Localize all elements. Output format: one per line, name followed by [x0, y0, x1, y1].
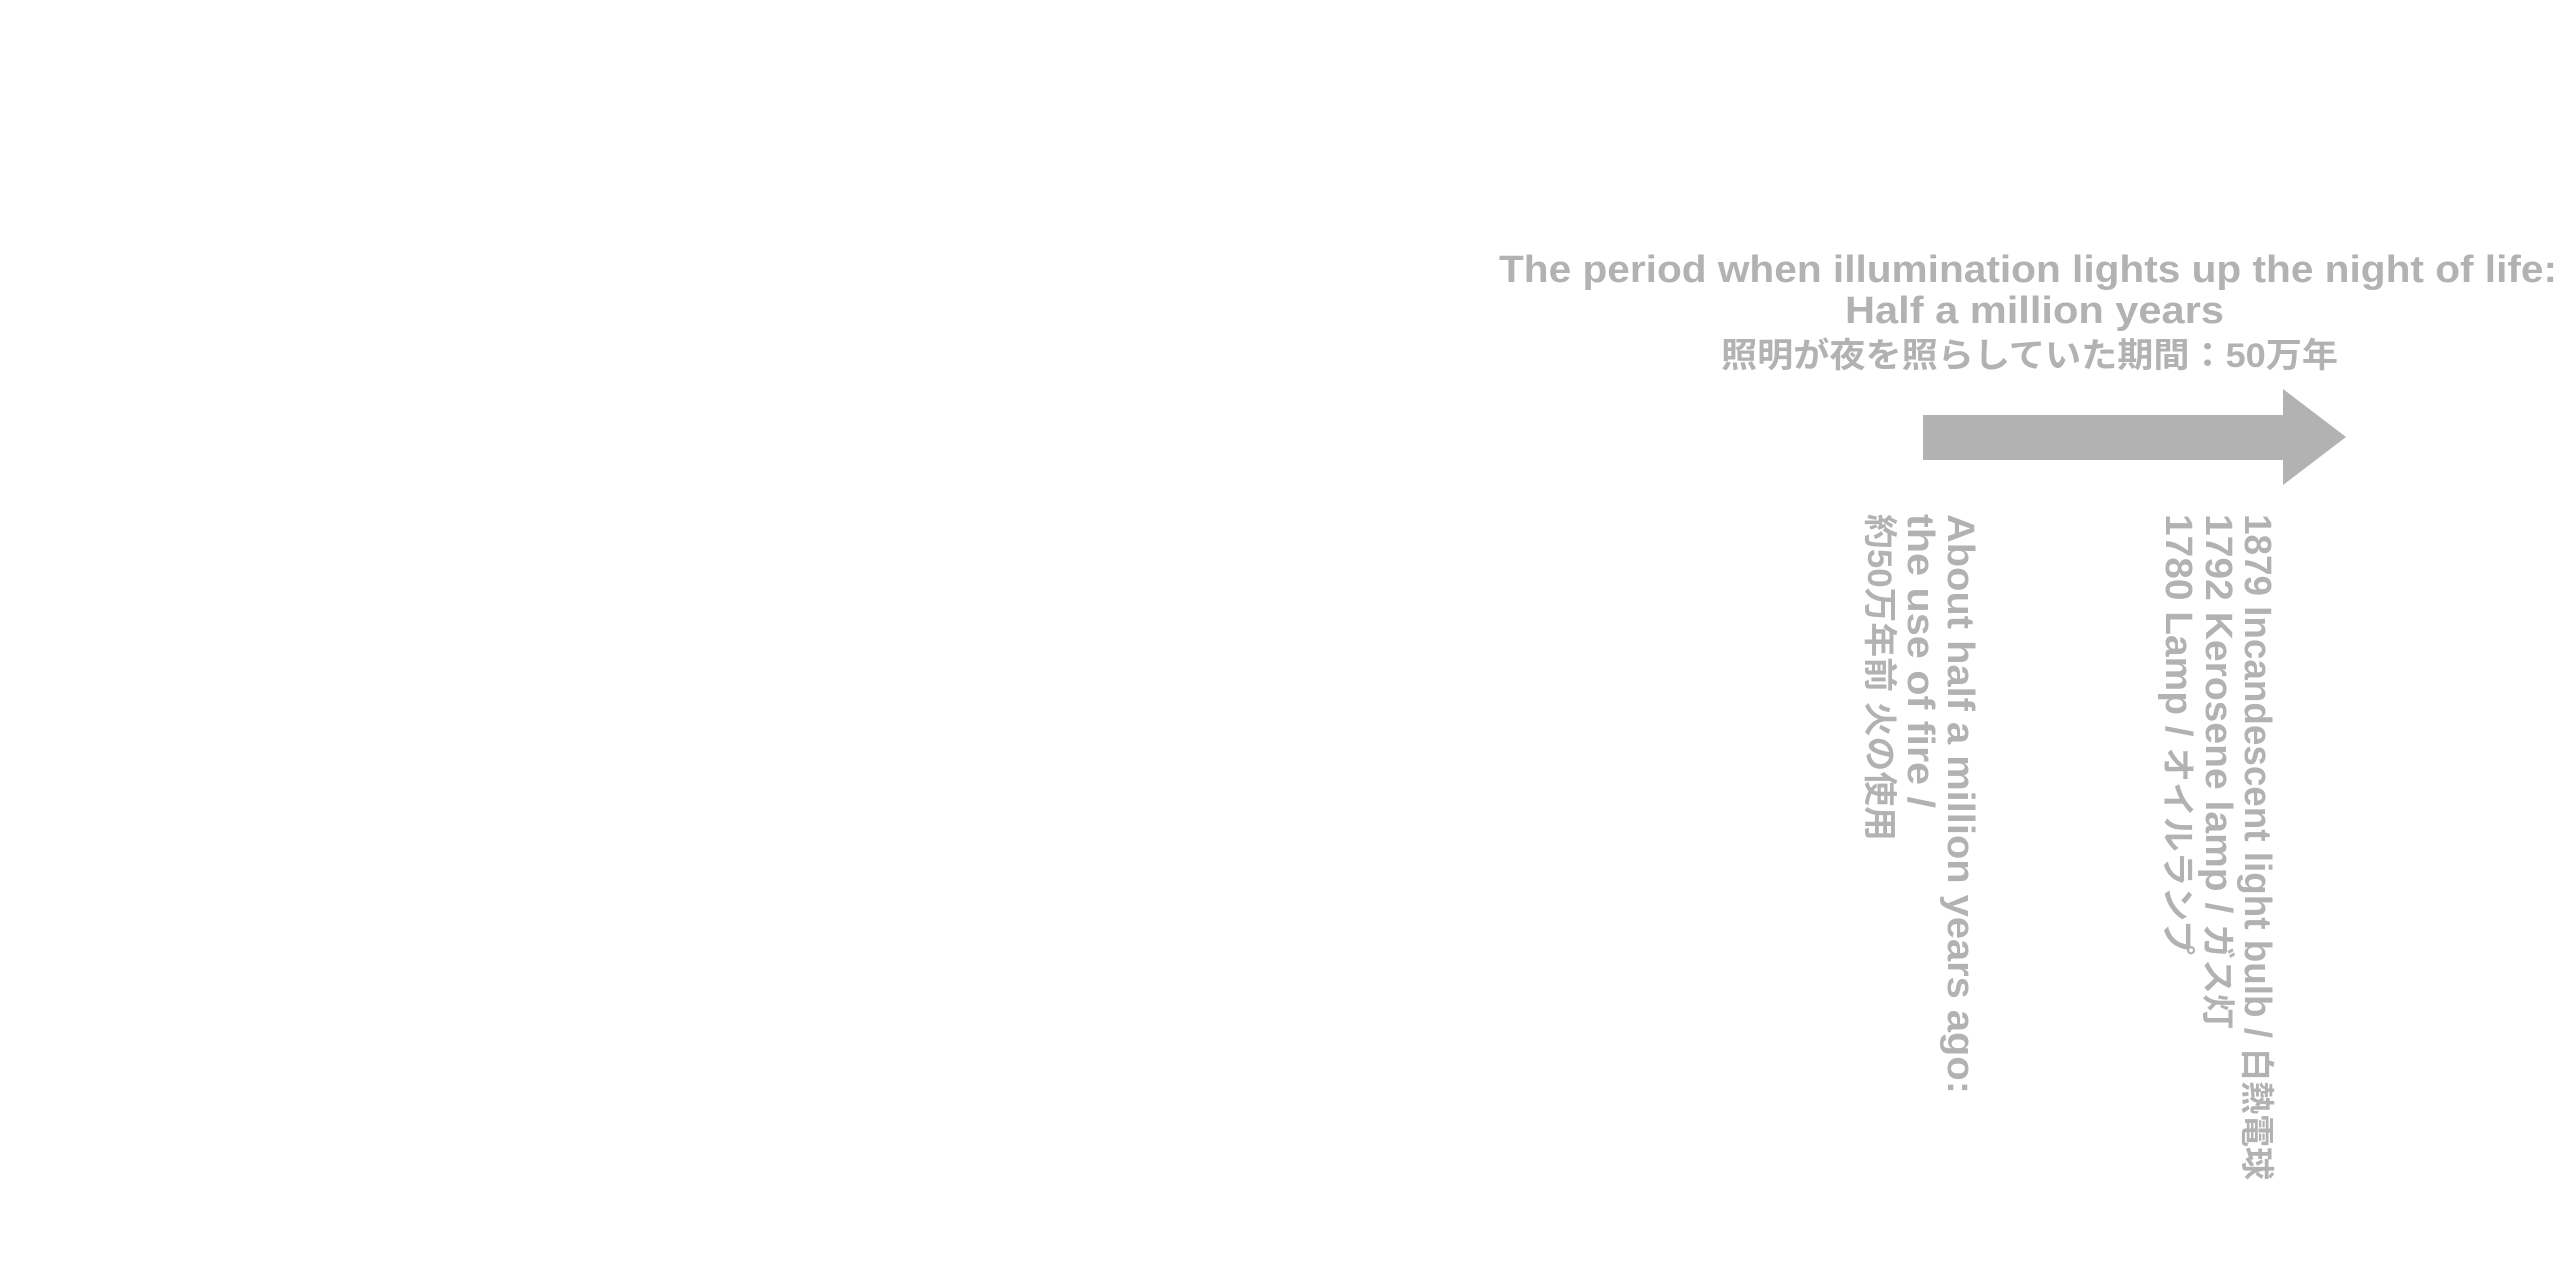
heading: period title: [1499, 249, 2557, 375]
heading: period title: The period when illumination lights up the night of life:: [1499, 249, 2557, 291]
text block: use of fire: the use of fire /: [1899, 514, 1941, 808]
text block: use of fire: 約50万年前 火の使用: [1860, 514, 1898, 841]
arrow: timeline direction: [1923, 389, 2346, 485]
text block: lamp history: 1879 Incandescent light bulb / 白熱電球: [2236, 514, 2278, 1180]
heading: period title: 照明が夜を照らしていた期間：50万年: [1721, 336, 2338, 375]
heading: period title: Half a million years: [1845, 290, 2224, 332]
text block: use of fire: [1860, 514, 1981, 1094]
text block: lamp history: 1792 Kerosene lamp / ガス灯: [2197, 514, 2239, 1029]
text block: lamp history: 1780 Lamp / オイルランプ: [2157, 514, 2199, 955]
text block: lamp history: [2157, 514, 2278, 1180]
text block: use of fire: About half a million years ago:: [1939, 514, 1981, 1094]
